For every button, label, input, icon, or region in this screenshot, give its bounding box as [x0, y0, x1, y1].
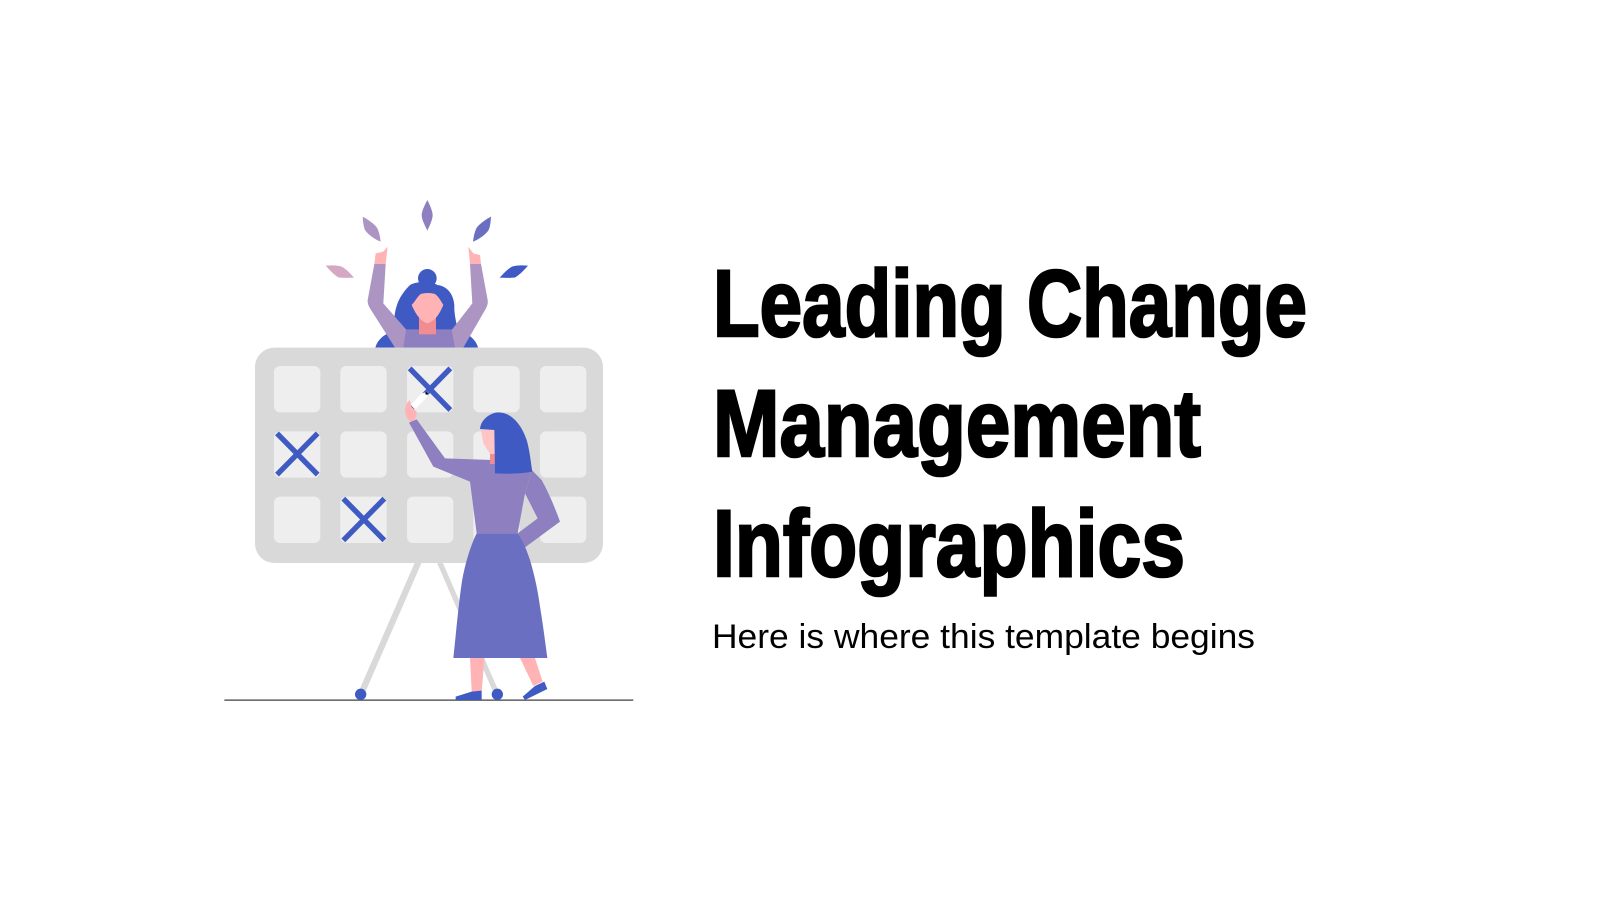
- title: Leading Change: [713, 251, 1307, 357]
- title: Management: [713, 371, 1201, 477]
- neck: [490, 454, 495, 464]
- icon: leaf right: [500, 265, 528, 278]
- icon: easel legs: [361, 560, 497, 693]
- face: [412, 293, 443, 323]
- left hand: [374, 247, 388, 264]
- calendar cells: [274, 366, 586, 543]
- left arm: [368, 264, 406, 348]
- right hand: [468, 247, 481, 264]
- icon: leaf top centre: [422, 200, 433, 231]
- title: Infographics: [713, 491, 1185, 597]
- ground line: [224, 699, 633, 701]
- left shoe: [456, 691, 482, 700]
- right shoe: [523, 682, 547, 700]
- icon: woman marking calendar: [405, 392, 560, 700]
- icon: leaf upper right: [473, 217, 491, 242]
- marker tip: [425, 392, 428, 395]
- icon: leaf upper left: [363, 217, 381, 242]
- torso and raised arm: [409, 419, 532, 533]
- hair: [480, 412, 532, 474]
- torso: [401, 329, 456, 348]
- neck: [419, 315, 436, 334]
- bent arm: [518, 470, 560, 547]
- raised hand: [405, 400, 417, 422]
- icon: cross marks: [277, 368, 450, 540]
- skirt: [453, 533, 547, 658]
- icon: leaf left: [326, 265, 354, 278]
- marker: [411, 392, 428, 409]
- right arm: [452, 264, 488, 348]
- hair shoulders: [375, 334, 478, 348]
- icon: celebrating woman behind board: [326, 200, 528, 348]
- icon: easel feet: [355, 689, 503, 700]
- left leg: [470, 658, 484, 692]
- hair: [394, 282, 458, 332]
- subtitle: Here is where this template begins: [712, 618, 1255, 656]
- face: [481, 430, 497, 455]
- panel: calendar board: [255, 348, 603, 563]
- title: [713, 251, 1307, 597]
- right leg: [520, 658, 543, 686]
- hair bun: [418, 269, 437, 288]
